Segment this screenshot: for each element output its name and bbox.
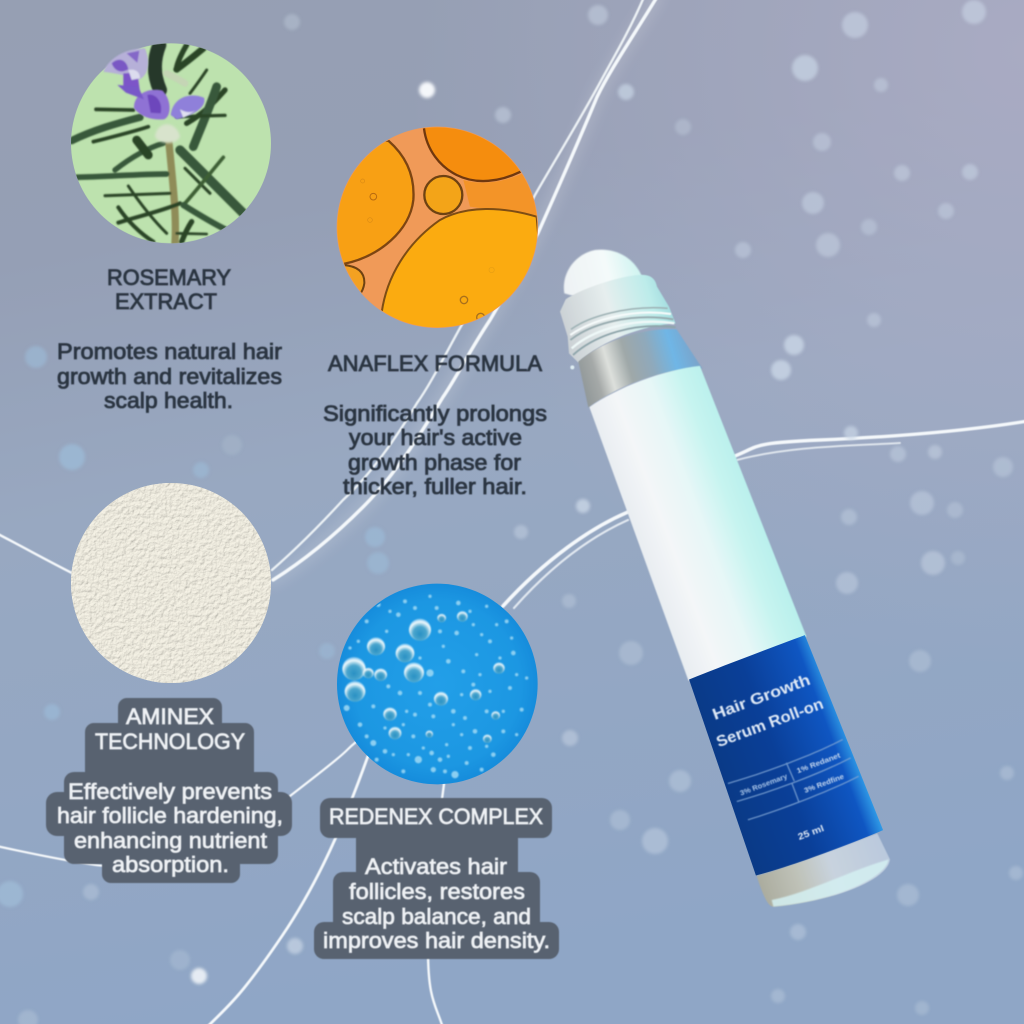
- label backing: [46, 698, 292, 883]
- description: Activates hair: [365, 854, 508, 879]
- text: rosemary description: growth and revitalizes: [57, 364, 282, 389]
- threaded neck: [560, 275, 676, 363]
- heading: REDENEX COMPLEX: [329, 804, 543, 829]
- ingredient image: rosemary: [71, 43, 271, 243]
- ingredient image: anaflex orange: [336, 126, 538, 328]
- roller ball: [564, 250, 642, 307]
- label title: [705, 670, 826, 751]
- text: anaflex description: your hair's active: [349, 425, 522, 450]
- description: scalp balance, and: [342, 904, 531, 929]
- description: hair follicle hardening,: [57, 803, 283, 828]
- heading: rosemary extract: EXTRACT: [115, 289, 217, 314]
- heading: [95, 704, 245, 754]
- description: follicles, restores: [349, 879, 525, 904]
- metal collar: [578, 329, 702, 407]
- ingredient table: [728, 739, 860, 823]
- text: rosemary description: scalp health.: [104, 388, 233, 413]
- heading: anaflex formula: ANAFLEX FORMULA: [328, 351, 542, 376]
- volume: 25 ml: [796, 823, 825, 842]
- heading: AMINEX: [126, 704, 214, 729]
- description: improves hair density.: [323, 928, 550, 953]
- ingredient table: 3% Redfine: [803, 772, 845, 795]
- text: anaflex description: Significantly prolongs: [323, 401, 547, 426]
- panel: aminex technology: [46, 698, 292, 883]
- text: rosemary description: Promotes natural hair: [57, 339, 283, 364]
- description: Effectively prevents: [68, 779, 272, 804]
- bottle head: roller, threads, collar: [560, 250, 702, 407]
- text: rosemary description: [57, 339, 283, 413]
- bottle body: [584, 358, 806, 681]
- panel: redenex complex: [314, 798, 559, 959]
- product: roll-on bottle: [560, 250, 890, 907]
- label title: Hair Growth: [710, 672, 813, 724]
- text: anaflex description: growth phase for: [348, 450, 522, 475]
- description: [57, 779, 283, 877]
- description: absorption.: [112, 852, 229, 877]
- text: anaflex description: [323, 401, 547, 499]
- label title: Serum Roll-on: [714, 696, 826, 751]
- text: anaflex description: thicker, fuller hair.: [343, 474, 527, 499]
- ingredient image: aminex powder: [71, 483, 271, 683]
- ingredient table: 3% Rosemary: [739, 771, 789, 798]
- heading: rosemary extract: ROSEMARY: [107, 265, 231, 290]
- metal base: [757, 833, 890, 907]
- blue label: [683, 633, 884, 879]
- description: [323, 854, 550, 953]
- ingredient table: 1% Redanet: [795, 751, 842, 775]
- heading: TECHNOLOGY: [95, 729, 245, 754]
- heading: rosemary extract: [107, 265, 231, 314]
- description: enhancing nutrient: [74, 828, 268, 853]
- ingredient image: redenex blue bubbles: [337, 584, 538, 784]
- label backing: [314, 798, 559, 959]
